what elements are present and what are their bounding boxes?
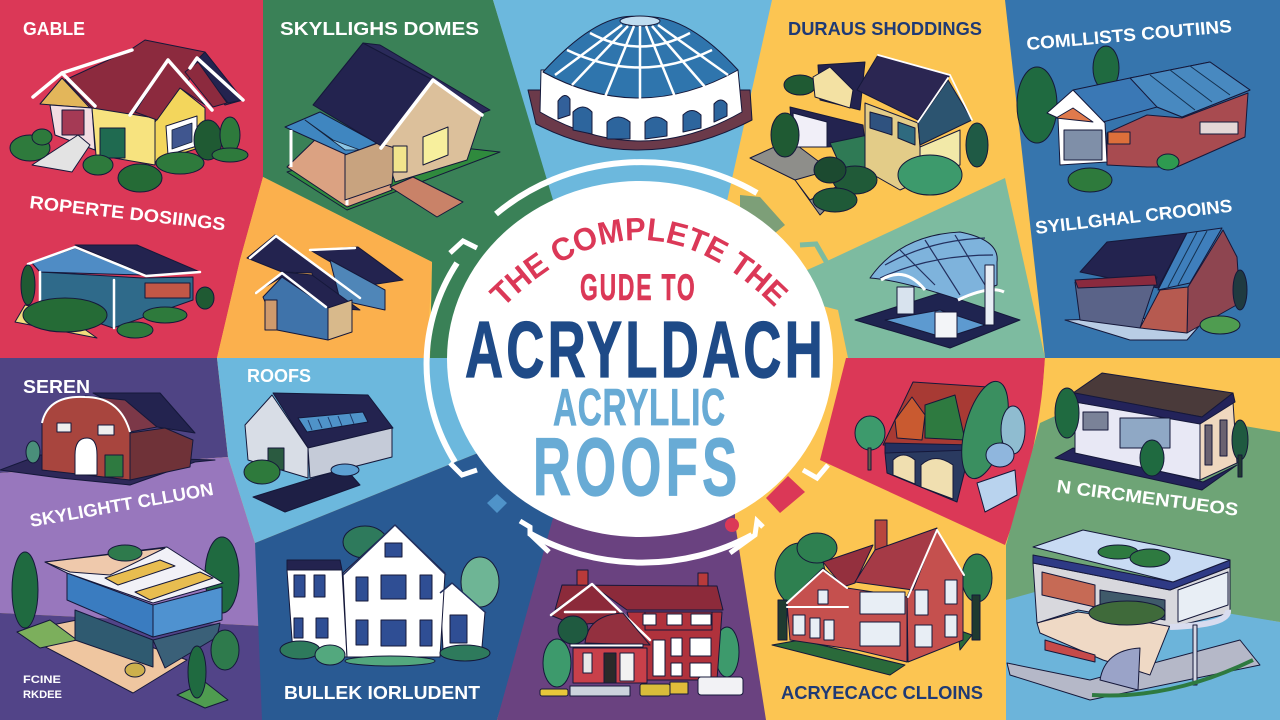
label: fcine rkdee [23, 674, 62, 701]
title [488, 218, 789, 307]
label: skylightt clluon: SKYLIGHTT CLLUON [28, 479, 215, 531]
ring: corner brackets and accents [450, 241, 828, 553]
label: seren: SEREN [23, 377, 90, 397]
icon: cottage with garage and hedge [855, 377, 1025, 512]
title line: acrylic: ACRYLLIC [553, 379, 725, 437]
label: skylights domes: SKYLLIGHS DOMES [280, 19, 479, 39]
title line: roofs: ROOFS [533, 421, 737, 513]
label: gable: GABLE [23, 19, 85, 39]
title line: the complete the: THE COMPLETE THE [488, 218, 789, 307]
label: syillghal crooins: SYILLGHAL CROOINS [1034, 196, 1233, 238]
title line: guide to: GUDE TO [580, 266, 695, 308]
icon: white suburban house [280, 525, 499, 666]
icon: modern terrace building [1007, 530, 1260, 700]
label: duraus shoddings: DURAUS SHODDINGS [788, 19, 982, 39]
icon: house with glass patio roof [285, 43, 500, 217]
icon: navy and blue roof barn [1065, 228, 1247, 340]
icon: glass gable pavilion [15, 245, 214, 338]
icon: blue shed with navy roofs [247, 235, 403, 340]
icon: gable house [10, 40, 248, 192]
label: bullek iorludent: BULLEK IORLUDENT [284, 683, 480, 703]
icon: brick commercial house with blue roof [1017, 46, 1250, 192]
label: fcine rkdee: FCINE [23, 674, 61, 686]
icon: arched brick barn [0, 393, 215, 485]
label: fcine rkdee: RKDEE [23, 689, 62, 701]
icon: red two-storey house [772, 520, 992, 675]
icon: flat-roof office building [1055, 373, 1248, 490]
central white circle [447, 181, 833, 537]
title line: acryldach: ACRYLDACH [465, 306, 823, 395]
label: n circmentueos: N CIRCMENTUEOS [1055, 476, 1240, 520]
label: roperte dosiings: ROPERTE DOSIINGS [29, 192, 227, 234]
label: roofs: ROOFS [247, 366, 311, 386]
label: comllists coutiins: COMLLISTS COUTIINS [1026, 16, 1233, 54]
label: acryecacc clloins: ACRYECACC CLLOINS [781, 683, 983, 703]
icon: yellow panel multi-gable home [750, 55, 988, 215]
ring: outer white arc segments [427, 162, 757, 563]
icon: clapboard barn with solar strip [244, 393, 393, 512]
icon: glass canopy structure [855, 232, 1020, 348]
icon: glass-faced commercial building [12, 537, 239, 708]
icon: glass dome [528, 16, 752, 150]
icon: brick house with cars [540, 570, 743, 696]
